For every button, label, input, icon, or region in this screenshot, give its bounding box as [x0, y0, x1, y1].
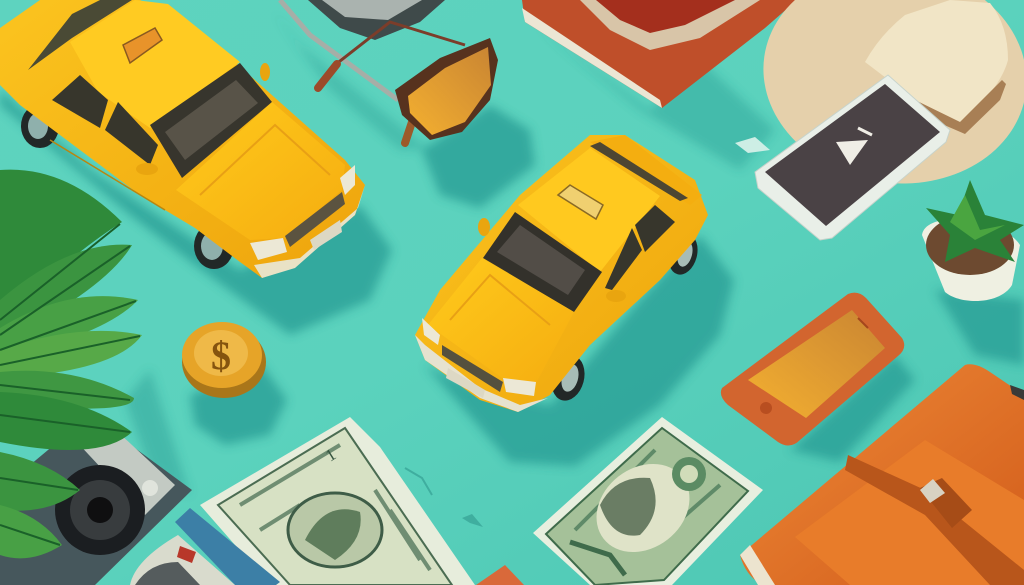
clasp — [920, 478, 972, 528]
dollar bill centre-left: 1 — [322, 445, 339, 465]
car body — [415, 135, 708, 412]
engraving — [575, 450, 720, 530]
sun hat — [749, 0, 1024, 200]
dollar bill right — [533, 417, 763, 585]
side windows — [52, 75, 108, 128]
windshield — [483, 212, 602, 312]
leather wallet — [740, 364, 1024, 585]
windshield — [150, 63, 272, 178]
grey device at top — [308, 0, 445, 40]
potted plant — [922, 180, 1024, 301]
red book — [522, 0, 797, 108]
crown — [865, 0, 1008, 122]
rear window strip — [590, 142, 688, 201]
dollar bill centre-left — [200, 417, 475, 585]
monstera leaf — [0, 170, 142, 558]
rear window strip — [28, 0, 132, 70]
roof — [518, 148, 660, 272]
wheels — [547, 352, 589, 404]
grille and bumper — [442, 345, 503, 392]
blue passport and device — [130, 508, 280, 585]
gold coin: $ — [211, 333, 231, 378]
mirrors — [136, 163, 158, 175]
taxi sign — [558, 185, 603, 219]
sunglasses — [280, 0, 498, 143]
wheels — [194, 223, 234, 269]
taxi sign — [123, 28, 162, 63]
small orange card — [476, 565, 524, 585]
portrait — [579, 446, 707, 570]
car body — [0, 0, 365, 278]
arms — [280, 0, 398, 100]
small paper scraps — [405, 137, 770, 527]
hood — [176, 102, 345, 240]
gold coin — [182, 322, 266, 398]
veins — [0, 224, 140, 545]
pot — [922, 219, 1020, 301]
smartphone — [755, 75, 950, 240]
portrait — [288, 493, 382, 567]
hood — [428, 258, 574, 385]
mirrors — [606, 290, 626, 302]
lens — [395, 38, 498, 140]
centre taxi — [415, 135, 708, 412]
engraving — [240, 445, 430, 570]
orange phone — [721, 293, 904, 446]
leaves — [926, 180, 1024, 262]
brim — [749, 0, 1024, 200]
vintage camera — [0, 415, 192, 585]
side windows — [605, 228, 642, 290]
grille and bumper — [285, 192, 345, 247]
left taxi — [0, 0, 365, 278]
roof — [70, 0, 240, 128]
